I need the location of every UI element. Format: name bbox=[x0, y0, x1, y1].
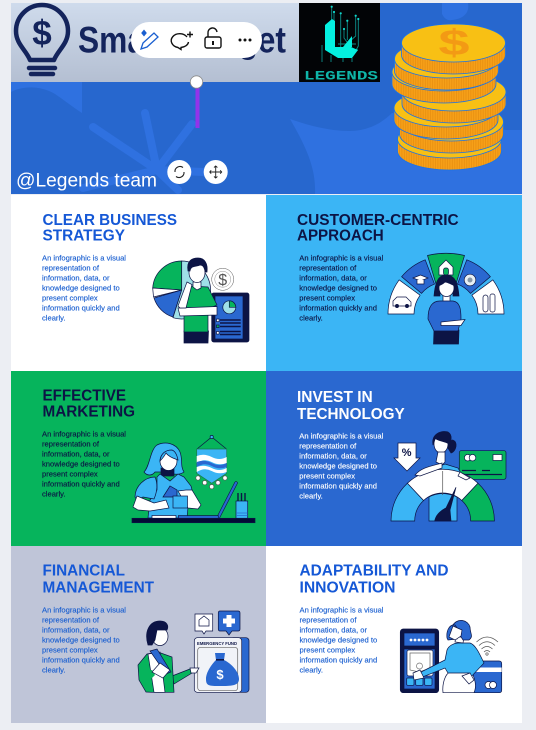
rotate button bbox=[167, 160, 191, 184]
heading: CUSTOMER-CENTRIC bbox=[297, 212, 459, 229]
body text: information quickly and bbox=[299, 304, 377, 313]
body text: information quickly and bbox=[42, 656, 120, 665]
heading: INVEST IN bbox=[297, 389, 373, 406]
body text: knowledge designed to bbox=[299, 462, 377, 471]
team credit: @Legends team bbox=[16, 170, 157, 192]
panel: financial management bbox=[11, 546, 266, 723]
body text: information quickly and bbox=[300, 656, 377, 665]
body text: information, data, or bbox=[42, 274, 110, 283]
logo wordmark: Smart Budget bbox=[78, 20, 286, 61]
coin stack bbox=[392, 22, 506, 170]
body text: knowledge designed to bbox=[300, 636, 377, 645]
icon: lock bbox=[205, 28, 221, 48]
body text: knowledge designed to bbox=[42, 460, 120, 469]
body text: representation of bbox=[42, 440, 100, 449]
body text: representation of bbox=[299, 264, 357, 273]
background shapes bbox=[11, 3, 522, 194]
body text: An infographic is a visual bbox=[300, 606, 384, 615]
heading: FINANCIAL bbox=[42, 563, 125, 580]
legends logo bbox=[299, 3, 380, 84]
heading: CLEAR BUSINESS bbox=[42, 212, 177, 229]
icon: comment bbox=[171, 32, 193, 50]
body text: clearly. bbox=[299, 314, 323, 323]
body text: An infographic is a visual bbox=[42, 606, 126, 615]
illustration: man with pie chart bbox=[153, 258, 249, 343]
heading: APPROACH bbox=[297, 228, 384, 245]
icon: more bbox=[238, 38, 252, 42]
icon: pencil bbox=[141, 30, 158, 49]
body text: knowledge designed to bbox=[299, 284, 377, 293]
body text: An infographic is a visual bbox=[42, 430, 126, 439]
body text: clearly. bbox=[42, 490, 66, 499]
illustration: woman with gauge and card: % bbox=[402, 447, 412, 459]
body text: representation of bbox=[42, 264, 100, 273]
body text: information, data, or bbox=[299, 452, 367, 461]
body text: clearly. bbox=[42, 666, 66, 675]
body text: An infographic is a visual bbox=[299, 432, 384, 441]
icon: light bulb with dollar bbox=[16, 5, 68, 74]
legends logo: LEGENDS bbox=[304, 70, 379, 84]
body text: present complex bbox=[42, 470, 98, 479]
panel: customer-centric approach bbox=[266, 195, 522, 371]
body text: information quickly and bbox=[299, 482, 377, 491]
body text: clearly. bbox=[299, 492, 323, 501]
panel: adaptability and innovation bbox=[266, 546, 522, 723]
body text: representation of bbox=[300, 616, 357, 625]
body text: representation of bbox=[42, 616, 100, 625]
illustration: woman with gauge and card bbox=[391, 432, 506, 521]
editor toolbar bbox=[131, 22, 262, 58]
illustration: man with emergency fund safe bbox=[138, 611, 249, 692]
coin stack: $ bbox=[438, 22, 470, 63]
body text: An infographic is a visual bbox=[299, 254, 384, 263]
heading: ADAPTABILITY AND bbox=[300, 563, 448, 580]
body text: information, data, or bbox=[42, 450, 110, 459]
heading: INNOVATION bbox=[300, 580, 396, 597]
panel: clear business strategy bbox=[11, 195, 266, 371]
body text: clearly. bbox=[42, 314, 66, 323]
illustration: woman with phone and card bbox=[400, 620, 502, 693]
body text: present complex bbox=[42, 294, 98, 303]
illustration: man with emergency fund safe: $ bbox=[216, 667, 224, 682]
illustration: man with pie chart: $ bbox=[218, 272, 227, 289]
rotation handle bbox=[190, 76, 203, 128]
body text: present complex bbox=[299, 294, 355, 303]
body text: present complex bbox=[42, 646, 98, 655]
heading: STRATEGY bbox=[42, 228, 126, 245]
body text: present complex bbox=[300, 646, 355, 655]
header banner bbox=[11, 3, 522, 194]
body text: clearly. bbox=[300, 666, 323, 675]
body text: information, data, or bbox=[42, 626, 110, 635]
illustration: man with emergency fund safe: EMERGENCY FUND bbox=[197, 641, 237, 646]
logo strip bbox=[11, 3, 299, 82]
body text: information, data, or bbox=[299, 274, 367, 283]
body text: An infographic is a visual bbox=[42, 254, 126, 263]
body text: knowledge designed to bbox=[42, 284, 120, 293]
icon: light bulb with dollar: $ bbox=[32, 14, 52, 53]
body text: information, data, or bbox=[300, 626, 368, 635]
panel: invest in technology bbox=[266, 371, 522, 546]
body text: information quickly and bbox=[42, 480, 120, 489]
panel: effective marketing bbox=[11, 371, 266, 546]
illustration: woman with banner and laptop bbox=[132, 435, 255, 523]
body text: information quickly and bbox=[42, 304, 120, 313]
illustration: woman with service fan bbox=[388, 253, 504, 344]
heading: TECHNOLOGY bbox=[297, 406, 405, 423]
body text: present complex bbox=[299, 472, 355, 481]
heading: MARKETING bbox=[42, 404, 135, 421]
heading: MANAGEMENT bbox=[42, 580, 155, 597]
move button bbox=[204, 160, 228, 184]
heading: EFFECTIVE bbox=[42, 388, 126, 405]
body text: representation of bbox=[299, 442, 357, 451]
body text: knowledge designed to bbox=[42, 636, 120, 645]
